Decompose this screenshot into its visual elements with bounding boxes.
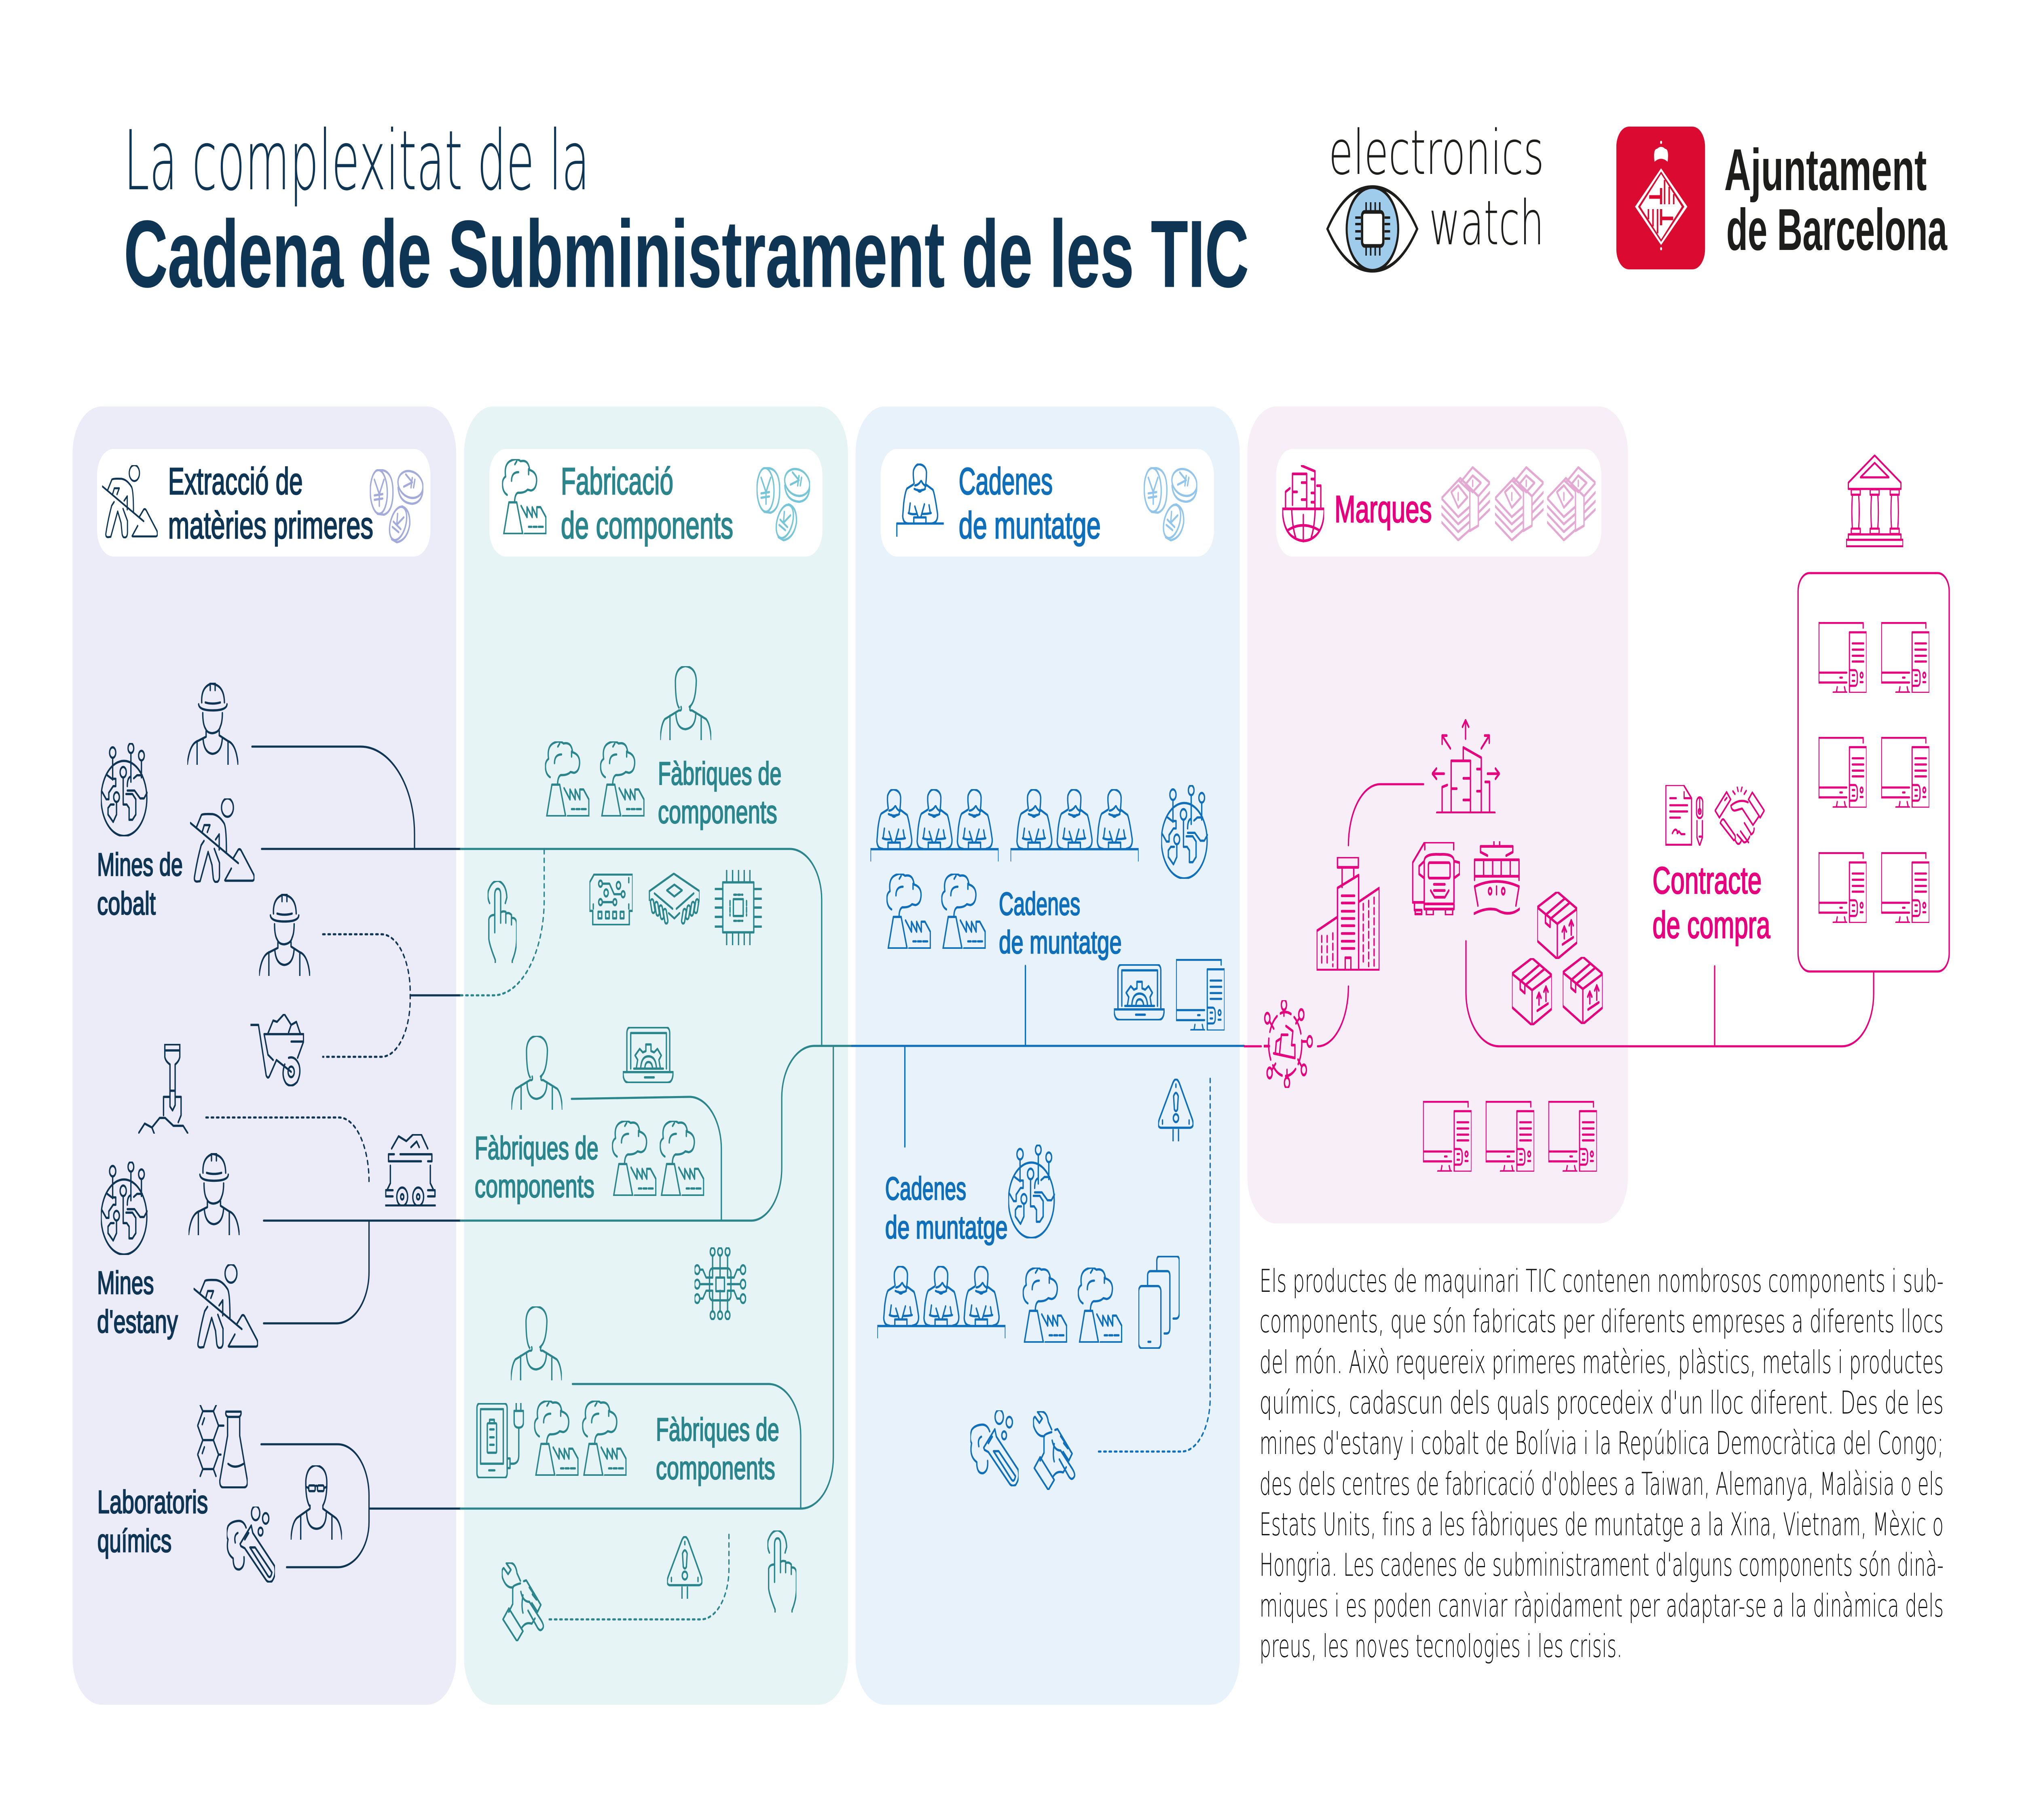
- text block: description: Hongria. Les cadenes de subministrament d'alguns components són dinà-: [1259, 1547, 1944, 1583]
- icon: factory: [1023, 1268, 1066, 1342]
- icon: shovel: [138, 1044, 188, 1134]
- label: Mines d'estany: d'estany: [97, 1304, 178, 1340]
- title line 2: Cadena de Subministrament de les TIC: [124, 201, 1249, 307]
- title: [124, 113, 1249, 307]
- icon: digger: [190, 798, 254, 882]
- connectors: manufacturing: [461, 849, 852, 1619]
- text block: description: del món. Això requereix primeres matèries, plàstics, metalls i productes: [1259, 1344, 1944, 1381]
- panel: extraction of raw materials: [72, 406, 456, 1705]
- panel: component manufacturing: [464, 406, 848, 1705]
- icon: globe: [101, 743, 147, 836]
- text block: description: miques i es poden canviar ràpidament per adaptar-se a la dinàmica dels: [1259, 1588, 1944, 1624]
- label: Mines de cobalt: cobalt: [97, 886, 156, 922]
- label: Contracte de compra: [1652, 859, 1770, 946]
- label: Mines de cobalt: Mines de: [97, 847, 183, 883]
- icon: desktop grid: [1819, 623, 1929, 923]
- icon: desktop: [1486, 1102, 1534, 1172]
- icon: assemblers: [1011, 789, 1139, 861]
- heading: [959, 460, 1101, 546]
- logo: Ajuntament de Barcelona: [1616, 127, 1948, 269]
- icon: warning: [667, 1537, 702, 1598]
- text block: description: Estats Units, fins a les fàbriques de muntatge a la Xina, Vietnam, Mèxic o: [1259, 1507, 1944, 1543]
- icon: coins: [756, 466, 811, 544]
- icon: factory header: [503, 459, 546, 534]
- icon: factory: [535, 1401, 578, 1475]
- label: assembly 2: Cadenes: [885, 1171, 966, 1207]
- label: factories 2: [475, 1130, 599, 1204]
- icon: digger header: [102, 465, 157, 538]
- label: assembly 2: de muntatge: [885, 1210, 1008, 1246]
- icon: box: [1512, 958, 1552, 1025]
- wordmark Ajuntament: Ajuntament: [1724, 137, 1927, 203]
- icons: logistics: [1264, 720, 1603, 1172]
- icons: mining and labs: [101, 682, 436, 1582]
- text block: description: [1259, 1263, 1944, 1665]
- icon: test tube: [227, 1506, 275, 1582]
- icon: miner: [187, 682, 238, 765]
- icon: coins: [1144, 466, 1198, 544]
- heading: matèries primeres: [168, 504, 373, 546]
- header pill: [97, 449, 430, 557]
- icon: headquarters: [1317, 857, 1379, 970]
- panel background: [464, 406, 848, 1705]
- icon: miner: [188, 1153, 239, 1235]
- icons: assembly: [870, 785, 1225, 1490]
- contract: purchase contract: [1652, 785, 1770, 946]
- icon: handshake: [1715, 787, 1764, 844]
- heading: de components: [561, 504, 733, 546]
- icon: worker: [511, 1306, 562, 1380]
- icon: factory: [601, 741, 644, 816]
- icon: globe: [101, 1162, 147, 1255]
- icon: laptop: [1114, 965, 1164, 1020]
- icon: warning: [1158, 1079, 1193, 1141]
- icon: contract and pen: [1666, 785, 1703, 846]
- label: factories 3: components: [656, 1450, 775, 1486]
- icon: assembler header: [897, 464, 944, 536]
- label: Laboratoris quimics: Laboratoris: [97, 1484, 208, 1520]
- icon: box: [1563, 957, 1603, 1024]
- label: factories 2: components: [475, 1168, 594, 1204]
- wordmark electronics: electronics: [1329, 116, 1544, 188]
- heading: [561, 460, 733, 546]
- icon: desktop: [1423, 1102, 1472, 1172]
- heading: Extracció de: [168, 460, 303, 502]
- icon: hand: [768, 1530, 796, 1613]
- icon: hand: [488, 881, 517, 963]
- icon: memory chip: [649, 874, 700, 924]
- icon: globe: [1161, 785, 1208, 878]
- icon: factory: [660, 1121, 704, 1196]
- text block: description: components, que són fabricats per diferents empreses a diferents llocs: [1259, 1304, 1944, 1340]
- icon: bill stacks: [1441, 468, 1596, 540]
- heading: Cadenes: [959, 460, 1053, 502]
- icon: factory: [583, 1401, 626, 1475]
- rounded frame: [1798, 573, 1949, 971]
- label: factories 3: [656, 1412, 779, 1486]
- heading: Fabricació: [561, 460, 673, 502]
- red badge with shield: [1616, 127, 1705, 269]
- label: assembly 1: Cadenes: [999, 886, 1080, 922]
- icon: worker: [511, 1036, 563, 1110]
- icon: box: [1537, 892, 1577, 959]
- public buyer: institution and computers: [1798, 455, 1949, 971]
- icon: network building: [1264, 1000, 1312, 1088]
- icon: molecule and flask: [198, 1405, 247, 1488]
- panel background: [72, 406, 456, 1705]
- panel: assembly chains: [856, 406, 1240, 1705]
- icon: wrench: [502, 1563, 544, 1641]
- icon: coins: [370, 468, 424, 546]
- heading: [168, 460, 373, 546]
- icon: desktop: [1176, 960, 1225, 1031]
- label: Contracte de compra: Contracte: [1652, 859, 1762, 902]
- icon: desktop: [1548, 1102, 1597, 1172]
- icon: digger: [194, 1264, 258, 1348]
- icon: ship: [1474, 841, 1520, 914]
- icon: processor: [715, 870, 762, 945]
- icon: factory: [546, 741, 589, 816]
- wordmark de Barcelona: de Barcelona: [1726, 197, 1948, 262]
- text block: description: des dels centres de fabricació d'oblees a Taiwan, Alemanya, Malàisia o els: [1259, 1466, 1944, 1503]
- icon: scientist: [291, 1465, 342, 1539]
- label: assembly 2: [885, 1171, 1008, 1246]
- heading: de muntatge: [959, 504, 1101, 546]
- label: Mines de cobalt: [97, 847, 183, 922]
- text block: description: químics, cadascun dels quals procedeix d'un lloc diferent. Des de les: [1259, 1385, 1944, 1421]
- header pill: [489, 449, 823, 557]
- icons: manufacturing: [477, 666, 796, 1641]
- icon: phones: [1139, 1256, 1179, 1348]
- panel background: [856, 406, 1240, 1705]
- icon: assemblers: [877, 1266, 1005, 1338]
- label: Laboratoris quimics: químics: [97, 1523, 171, 1559]
- icon: circuit chip: [695, 1248, 746, 1319]
- icon: globe building: [1282, 466, 1324, 542]
- label: Mines d'estany: [97, 1265, 178, 1340]
- logo: electronics watch: [1327, 116, 1544, 271]
- icon: factory: [612, 1121, 656, 1196]
- header pill: [881, 449, 1214, 557]
- header pill: [1276, 449, 1601, 557]
- icon: worker: [660, 666, 711, 740]
- connectors: assembly: [852, 966, 1244, 1452]
- label: factories 3: Fàbriques de: [656, 1412, 779, 1448]
- icon: wheelbarrow: [250, 1014, 304, 1086]
- text block: description: preus, les noves tecnologies i les crisis.: [1259, 1628, 1622, 1665]
- icon: mine cart: [385, 1134, 436, 1206]
- icon: laptop: [623, 1027, 673, 1083]
- icon: miner: [259, 893, 310, 976]
- wordmark watch: watch: [1429, 187, 1544, 259]
- title line 1: La complexitat de la: [124, 113, 590, 209]
- eye icon: [1327, 187, 1417, 271]
- icon: truck: [1413, 842, 1459, 915]
- icon: globe: [1009, 1145, 1054, 1238]
- icon: institution: [1846, 455, 1903, 546]
- icon: factory: [942, 874, 985, 948]
- label: factories 1: [658, 756, 781, 830]
- icon: wrench: [1033, 1412, 1074, 1490]
- text block: description: Els productes de maquinari TIC contenen nombrosos components i sub-: [1259, 1263, 1944, 1299]
- label: assembly 1: [999, 886, 1122, 961]
- icon: test tube: [970, 1410, 1019, 1486]
- panel background: [1247, 406, 1628, 1223]
- heading: Marques: [1335, 488, 1432, 530]
- icon: tablet: [477, 1403, 523, 1478]
- connectors: extraction: [206, 747, 461, 1567]
- label: Laboratoris quimics: [97, 1484, 208, 1559]
- label: factories 2: Fàbriques de: [475, 1130, 599, 1166]
- icon: assemblers: [870, 789, 998, 861]
- label: factories 1: Fàbriques de: [658, 756, 782, 792]
- icon: factory: [1078, 1268, 1122, 1342]
- connectors: brands to buyer: [1244, 784, 1874, 1046]
- icon: building with arrows: [1432, 720, 1499, 813]
- panel: brands: [1247, 406, 1628, 1223]
- label: Contracte de compra: de compra: [1652, 904, 1770, 946]
- icon: circuit board: [590, 874, 632, 925]
- label: assembly 1: de muntatge: [999, 925, 1122, 961]
- label: Mines d'estany: Mines: [97, 1265, 154, 1301]
- text block: description: mines d'estany i cobalt de Bolívia i la República Democràtica del Congo;: [1259, 1425, 1944, 1462]
- label: factories 1: components: [658, 794, 777, 830]
- icon: factory: [887, 874, 931, 948]
